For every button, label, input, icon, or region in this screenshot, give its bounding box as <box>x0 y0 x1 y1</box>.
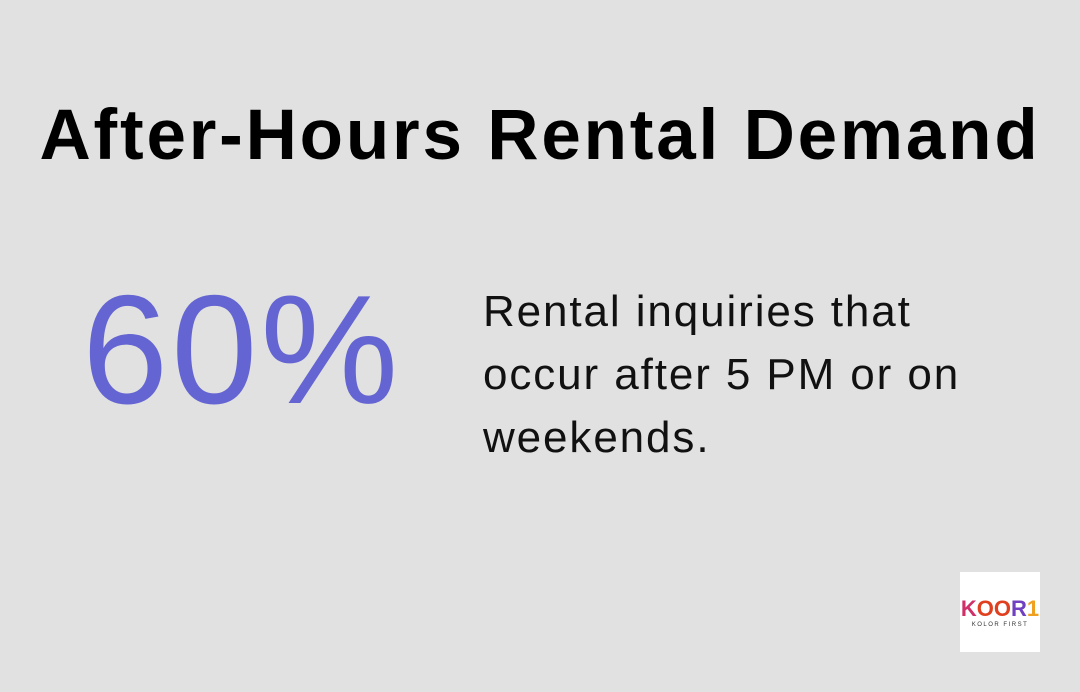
stat number: 60% <box>82 263 401 436</box>
logo: KOLOR FIRST <box>972 622 1028 628</box>
title: After-Hours Rental Demand <box>39 96 1040 175</box>
description text: Rental inquiries that <box>483 287 912 336</box>
description text: occur after 5 PM or on <box>483 350 960 399</box>
description text: weekends. <box>483 413 710 462</box>
logo: KOOR1 <box>961 596 1039 621</box>
logo <box>960 572 1040 652</box>
description text <box>483 287 960 462</box>
